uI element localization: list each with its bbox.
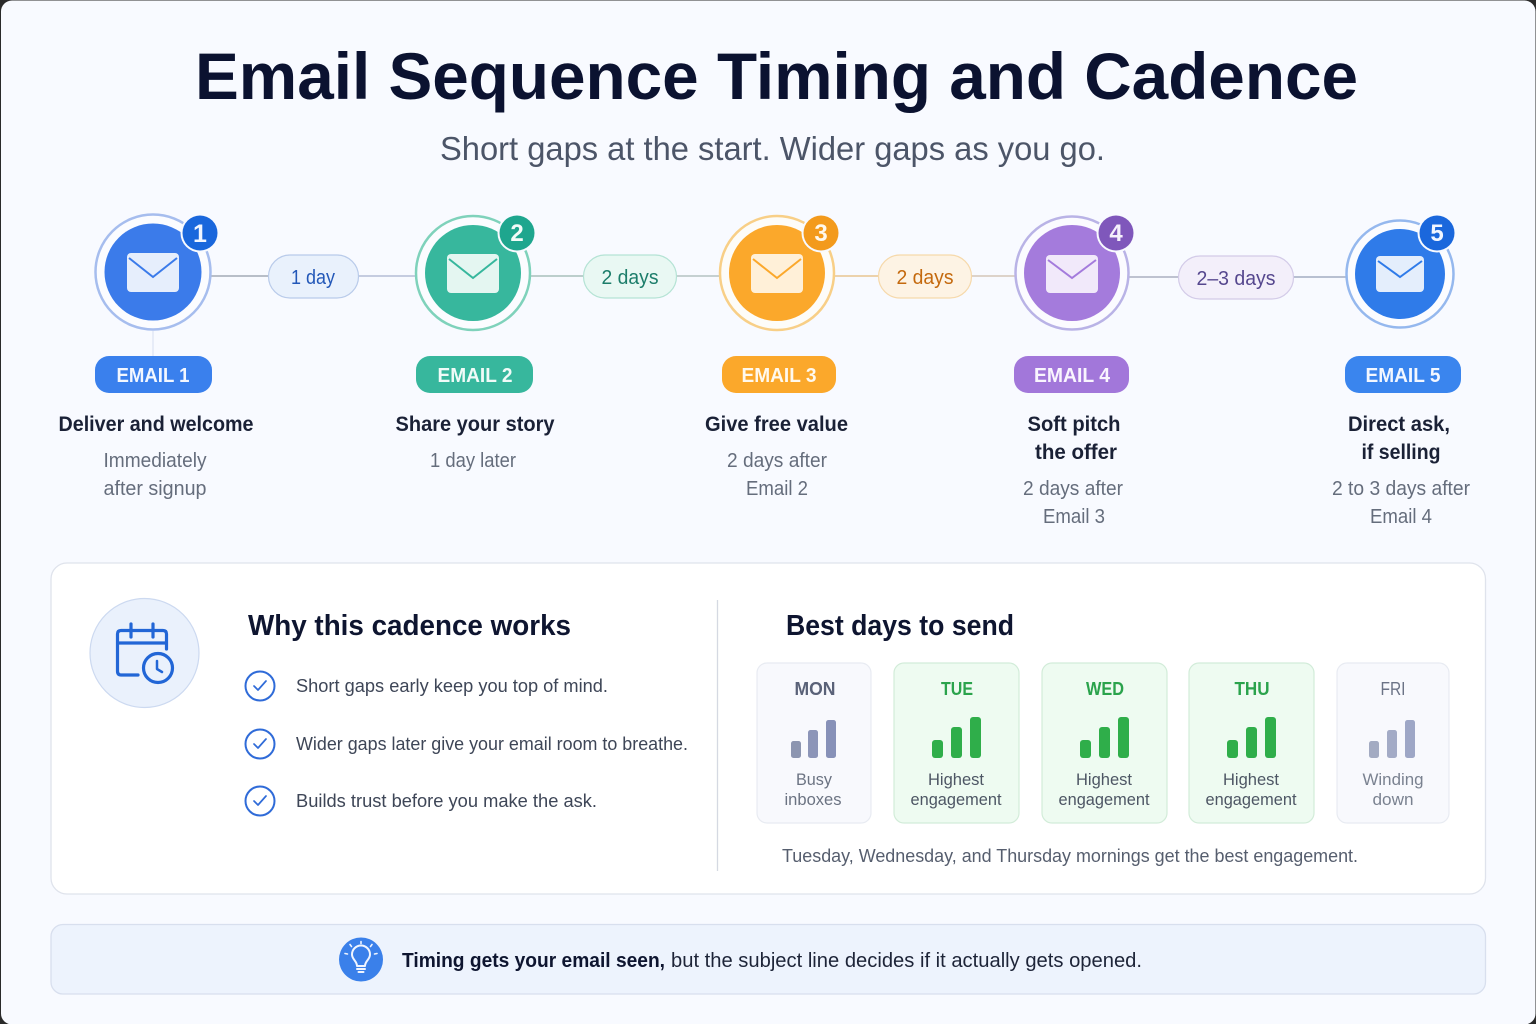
panel: cadence and best days xyxy=(51,563,1486,894)
day card: friday: down xyxy=(1372,790,1414,809)
check item 2 xyxy=(246,730,688,758)
email 2 node xyxy=(416,214,536,330)
badge 2: 2 xyxy=(510,220,524,247)
step 1 label xyxy=(58,356,254,500)
step 3 label: Give free value xyxy=(705,412,848,436)
day card: wednesday: engagement xyxy=(1058,790,1150,809)
email 1 node xyxy=(96,214,220,330)
step 5 label: Email 4 xyxy=(1370,506,1432,528)
heading: why this cadence works: Why this cadence works xyxy=(248,610,571,642)
callout: subject line tip xyxy=(51,924,1486,994)
day card: friday: FRI xyxy=(1380,679,1406,699)
email 4 node xyxy=(1016,214,1136,330)
email 5 node xyxy=(1346,214,1456,328)
step 1 label: EMAIL 1 xyxy=(116,365,190,387)
day card: friday xyxy=(1337,663,1449,823)
day card: friday: Winding xyxy=(1362,770,1424,789)
icon: calendar with clock xyxy=(90,598,199,708)
day card: thursday: THU xyxy=(1234,679,1270,699)
step 5 label: if selling xyxy=(1362,440,1440,464)
step 2 label: EMAIL 2 xyxy=(438,365,512,387)
gap pill: 1 day: 1 day xyxy=(291,266,336,289)
icon: envelope 1 xyxy=(127,253,179,292)
step 1 label: Immediately xyxy=(104,450,206,472)
caption: best engagement: Tuesday, Wednesday, and Thursday mornings get the best engagement. xyxy=(782,846,1358,866)
day card: thursday: engagement xyxy=(1206,790,1297,809)
step 4 label: the offer xyxy=(1035,440,1118,464)
day card: tuesday: TUE xyxy=(941,679,973,699)
day card: monday: Busy xyxy=(796,770,832,789)
icon: envelope 2 xyxy=(447,254,499,293)
day card: monday xyxy=(757,663,871,823)
gap pill: 2 days xyxy=(584,255,676,298)
timeline connector lines xyxy=(153,276,1347,357)
step 4 label: Email 3 xyxy=(1043,506,1105,528)
callout text: Timing gets your email seen, xyxy=(402,949,665,972)
gap pill: 2 days: 2 days xyxy=(896,266,954,289)
gap pill: 2 days xyxy=(878,255,972,298)
step 2 label xyxy=(396,356,555,472)
callout text xyxy=(402,949,1142,972)
subtitle: Short gaps at the start. Wider gaps as you go. xyxy=(440,130,1105,167)
check item 3: Builds trust before you make the ask. xyxy=(296,790,597,811)
check item 1 xyxy=(246,672,608,700)
day card: thursday: Highest xyxy=(1223,770,1279,789)
title: Email Sequence Timing and Cadence xyxy=(195,39,1358,113)
day card: monday: inboxes xyxy=(784,790,842,809)
step 5 label: EMAIL 5 xyxy=(1366,365,1440,387)
step 2 label: Share your story xyxy=(396,412,555,436)
step 4 label: 2 days after xyxy=(1023,478,1123,500)
day card: tuesday xyxy=(894,663,1019,823)
step 4 label: Soft pitch xyxy=(1028,412,1120,436)
step 3 label: Email 2 xyxy=(746,478,808,500)
day card: thursday xyxy=(1189,663,1314,823)
icon: envelope 5 xyxy=(1376,256,1424,292)
step 5 label: 2 to 3 days after xyxy=(1332,478,1470,500)
callout text: but the subject line decides if it actually gets opened. xyxy=(671,949,1142,972)
step 5 label xyxy=(1332,356,1470,528)
day card: monday: MON xyxy=(794,679,836,699)
badge 1: 1 xyxy=(193,220,207,248)
icon: envelope 4 xyxy=(1046,255,1098,293)
badge 5: 5 xyxy=(1430,220,1444,247)
icon: light bulb xyxy=(339,938,383,982)
check item 1: Short gaps early keep you top of mind. xyxy=(296,675,608,696)
heading: best days to send: Best days to send xyxy=(786,610,1014,642)
step 4 label: EMAIL 4 xyxy=(1034,365,1111,387)
step 1 label: after signup xyxy=(104,478,206,500)
check item 3 xyxy=(246,786,597,816)
step 3 label: EMAIL 3 xyxy=(742,365,816,387)
gap pill: 2-3 days: 2–3 days xyxy=(1196,267,1276,290)
step 2 label: 1 day later xyxy=(430,450,516,472)
badge 3: 3 xyxy=(814,220,828,247)
step 1 label: Deliver and welcome xyxy=(58,412,254,436)
step 4 label xyxy=(1014,356,1129,528)
day card: tuesday: Highest xyxy=(928,770,984,789)
day card: wednesday xyxy=(1042,663,1167,823)
step 3 label: 2 days after xyxy=(727,450,827,472)
icon: envelope 3 xyxy=(751,254,803,293)
badge 4: 4 xyxy=(1109,220,1123,247)
email 3 node xyxy=(720,214,840,330)
step 3 label xyxy=(705,356,848,500)
step 5 label: Direct ask, xyxy=(1348,412,1450,436)
day card: wednesday: Highest xyxy=(1076,770,1132,789)
day card: tuesday: engagement xyxy=(910,790,1002,809)
gap pill: 2-3 days xyxy=(1178,256,1294,299)
gap pill: 2 days: 2 days xyxy=(602,266,658,289)
day card: wednesday: WED xyxy=(1086,679,1124,699)
check item 2: Wider gaps later give your email room to breathe. xyxy=(296,733,688,754)
gap pill: 1 day xyxy=(268,255,358,298)
